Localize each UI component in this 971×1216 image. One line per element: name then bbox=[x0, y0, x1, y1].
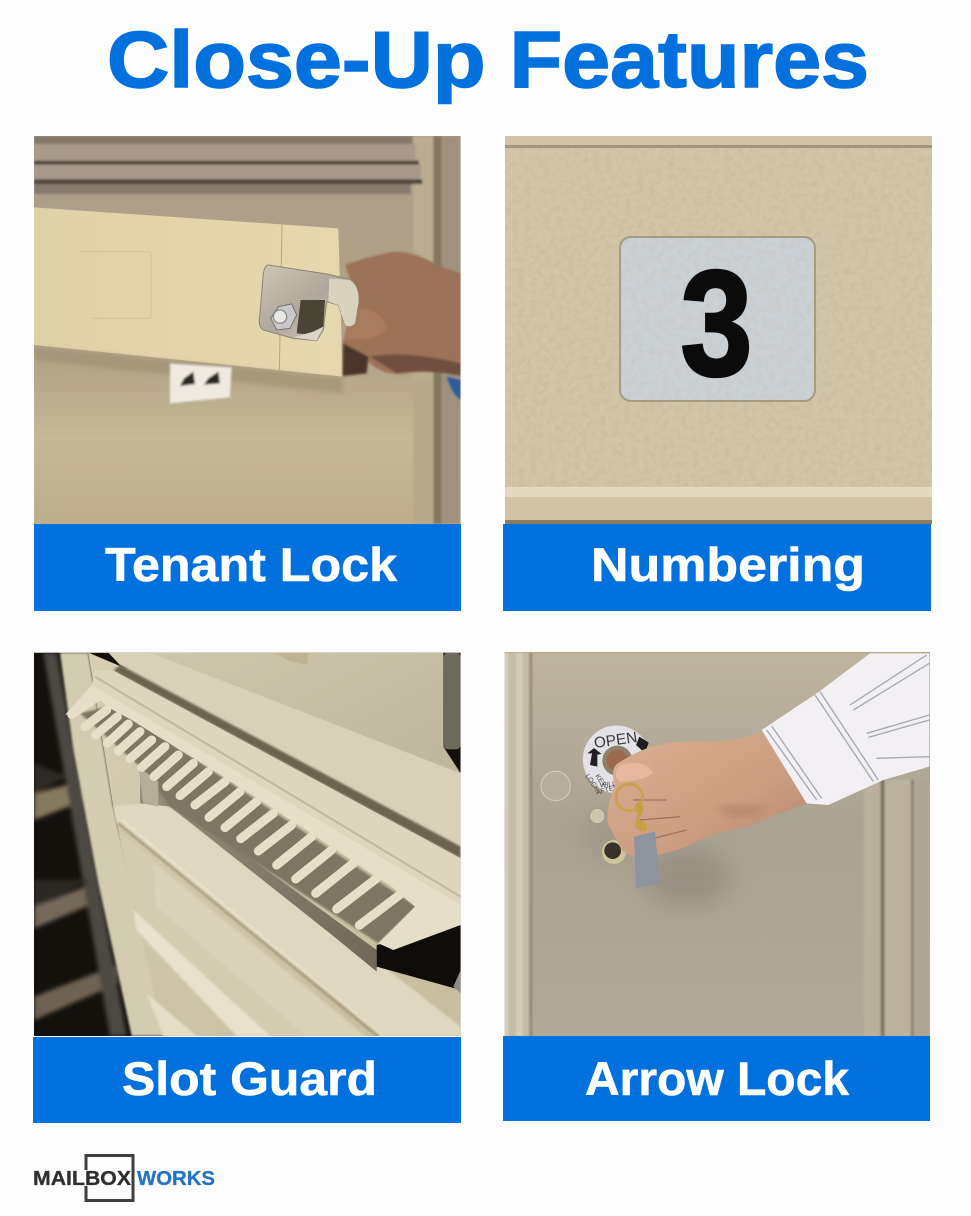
button bbox=[590, 808, 605, 824]
photo: numbering bbox=[505, 136, 932, 524]
slot guard comb bbox=[72, 698, 402, 925]
latch bbox=[259, 265, 359, 341]
panel: numbering bbox=[503, 136, 932, 611]
shadow behind slot guard bbox=[140, 757, 377, 972]
upper door face bbox=[150, 652, 460, 774]
panel: slot guard bbox=[33, 653, 461, 1123]
photo: tenant lock bbox=[34, 136, 461, 524]
logo: mailbox works: WORKS bbox=[137, 1168, 215, 1190]
key ring and clip bbox=[616, 784, 647, 831]
number plate bbox=[620, 237, 815, 407]
door bbox=[34, 207, 343, 377]
lower lock bbox=[602, 840, 626, 864]
cabinet frame bbox=[60, 653, 167, 1036]
lower cabinet bbox=[88, 653, 461, 1036]
open sticker: OPEN bbox=[593, 729, 638, 752]
number plate: 3 bbox=[680, 239, 752, 407]
panel: tenant lock bbox=[34, 136, 461, 611]
label bar: numbering: Numbering bbox=[591, 538, 865, 591]
open sticker: WILL bbox=[600, 781, 617, 789]
panel: arrow lock bbox=[503, 652, 930, 1121]
photo: slot guard bbox=[34, 653, 461, 1037]
hand bbox=[343, 252, 461, 400]
label bar: tenant lock: Tenant Lock bbox=[105, 538, 398, 591]
left trim bbox=[505, 653, 532, 1037]
right trim bbox=[864, 780, 916, 1036]
open sticker: KEY bbox=[593, 773, 607, 789]
label bar: arrow lock bbox=[503, 1036, 930, 1121]
shirt sleeve bbox=[762, 653, 929, 805]
open sticker bbox=[583, 725, 651, 797]
label bar: slot guard bbox=[33, 1037, 461, 1123]
label bar: slot guard: Slot Guard bbox=[122, 1052, 377, 1105]
key tag bbox=[634, 832, 660, 889]
band above comb bbox=[92, 671, 461, 907]
plug circle bbox=[541, 771, 570, 801]
upper lip bbox=[108, 653, 461, 847]
label bar: numbering bbox=[503, 524, 931, 611]
logo: mailbox works bbox=[33, 1156, 215, 1200]
logo: mailbox works: MAILBOX bbox=[33, 1168, 132, 1190]
label bar: arrow lock: Arrow Lock bbox=[585, 1052, 850, 1105]
open sticker: AFTER bbox=[595, 784, 619, 797]
hand bbox=[607, 732, 807, 857]
photo: arrow lock bbox=[504, 652, 930, 1037]
lower panels bbox=[113, 800, 461, 1037]
label bar: tenant lock bbox=[34, 524, 461, 611]
title: Close-Up Features bbox=[107, 15, 869, 104]
open sticker: LOCK bbox=[583, 773, 600, 793]
wall plate bbox=[170, 363, 232, 403]
groove bbox=[113, 665, 461, 858]
